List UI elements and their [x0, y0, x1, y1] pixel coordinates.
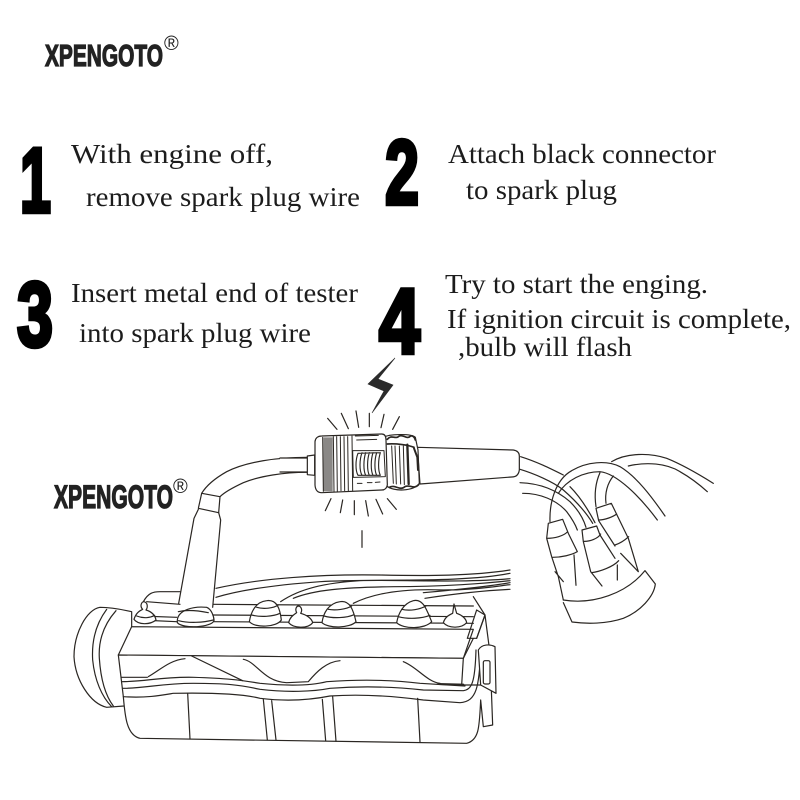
icon: lightning bolt: [368, 358, 395, 413]
wire collar: [280, 455, 315, 475]
step 4: ,bulb will flash: [458, 332, 633, 362]
step 2: 2: [385, 122, 419, 224]
step 3: 3: [17, 264, 53, 366]
cover body: [118, 653, 493, 743]
end cap: [74, 607, 132, 707]
brand logo top: [45, 33, 179, 73]
engine valve cover: [74, 570, 510, 743]
step 3: Insert metal end of tester: [71, 278, 358, 308]
ignition wire bundle: [216, 570, 510, 603]
step 1: 1: [20, 130, 51, 232]
rear looping wires: [550, 463, 665, 522]
brand logo top: XPENGOTO: [45, 38, 163, 73]
rays: [325, 411, 399, 547]
spark tester bulb with light rays: [280, 411, 519, 547]
cap base: [563, 571, 655, 623]
wires leaving tester: [520, 457, 593, 523]
brand logo on diagram: XPENGOTO: [54, 479, 173, 515]
step 3: [17, 264, 358, 366]
coil: [356, 453, 380, 475]
step 4: If ignition circuit is complete,: [447, 304, 791, 334]
cylinder head rail: [140, 592, 490, 653]
side bracket: [463, 610, 496, 693]
threaded end: [384, 435, 419, 490]
step 2: to spark plug: [466, 175, 617, 205]
step 1: remove spark plug wire: [86, 182, 360, 212]
small terminals: [134, 602, 467, 627]
step 1: With engine off,: [71, 139, 273, 169]
distributor cap and wires: [520, 454, 713, 623]
step 2: [385, 122, 716, 224]
bulb body: [315, 434, 387, 493]
tester handle: [417, 447, 519, 484]
cover top: [118, 627, 473, 658]
brand logo top: ®: [164, 33, 179, 55]
wire from tester to engine boot: [179, 457, 307, 607]
step 4: 4: [379, 271, 420, 373]
step 4: [379, 269, 791, 373]
body ribs: [188, 693, 420, 742]
step 2: Attach black connector: [448, 139, 716, 169]
step 4: Try to start the enging.: [445, 269, 708, 299]
cover contour lines: [148, 656, 440, 683]
gasket bands: [122, 650, 481, 703]
boots: [547, 519, 577, 600]
step 1: [20, 130, 360, 232]
brand logo on diagram: ®: [173, 476, 188, 498]
brand logo on diagram: [54, 476, 188, 515]
plug boot row: [177, 600, 432, 628]
step 3: into spark plug wire: [79, 318, 311, 348]
